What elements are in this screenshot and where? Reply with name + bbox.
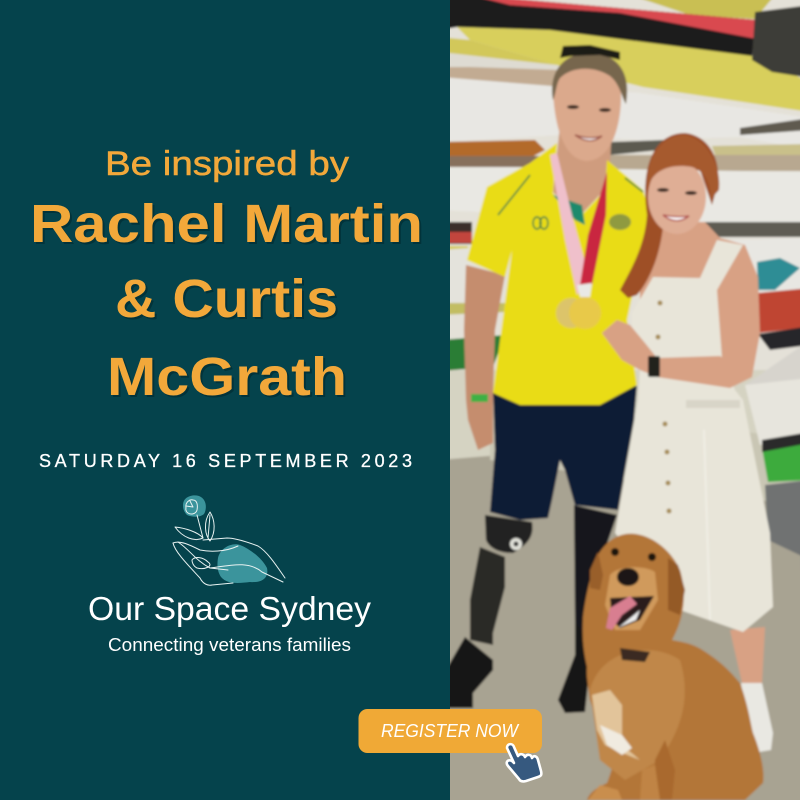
kayaks on racks	[440, 0, 800, 482]
man: head and neck	[552, 45, 627, 218]
man: prosthetic leg and shoes	[440, 505, 617, 713]
logo: hand holding flower	[173, 495, 285, 585]
event date: SATURDAY 16 SEPTEMBER 2023	[39, 451, 412, 471]
button: register now: REGISTER NOW	[381, 721, 520, 741]
panel: teal background	[0, 0, 450, 800]
heading: speaker names	[30, 194, 425, 409]
button: register now	[358, 709, 542, 753]
logo tagline: Connecting veterans families	[108, 634, 351, 655]
heading: speaker names: & Curtis	[115, 269, 338, 329]
logo wordmark: Our Space Sydney: Our Space Sydney	[88, 590, 371, 627]
man: arm	[464, 265, 505, 450]
heading: speaker names: McGrath	[109, 349, 349, 409]
man: yellow polo shirt	[467, 143, 650, 405]
icon: pointing hand cursor	[507, 744, 541, 781]
heading: Be inspired by: Be inspired by	[105, 145, 349, 183]
golden retriever	[583, 534, 763, 800]
heading: speaker names: Rachel Martin	[30, 194, 423, 254]
heading: speaker names: Rachel Martin	[32, 196, 425, 256]
heading: speaker names: McGrath	[107, 347, 347, 407]
woman: arm over dress, hand and watch	[602, 320, 752, 388]
man: navy shorts	[490, 386, 637, 520]
woman: white dress	[615, 240, 773, 632]
woman: hair and face	[620, 133, 719, 298]
photo: couple with dog in front of kayak racks	[440, 0, 800, 800]
medal ribbons and gold medals	[550, 153, 607, 329]
woman: skin of neck, chest and arm, and far leg	[640, 222, 765, 683]
heading: speaker names: & Curtis	[117, 271, 340, 331]
white sneaker	[741, 683, 773, 753]
photo background: boatshed wall and floor	[440, 0, 800, 800]
